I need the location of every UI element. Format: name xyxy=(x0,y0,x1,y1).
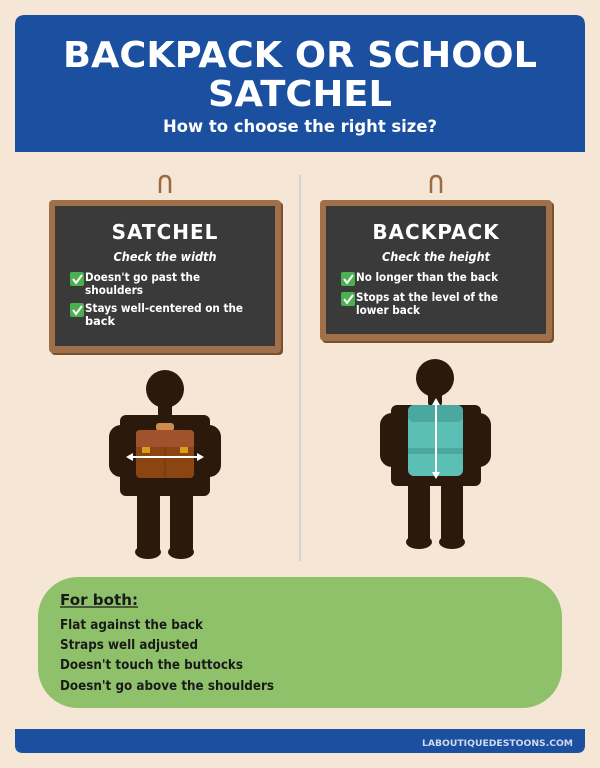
footer xyxy=(15,729,585,753)
panel: satchel board: SATCHEL xyxy=(112,220,218,244)
checklist xyxy=(341,270,498,317)
checklist: Stops at the level of the xyxy=(356,290,498,304)
figure: backpack xyxy=(380,359,491,549)
panel: satchel board xyxy=(49,176,283,355)
arrow: height xyxy=(432,398,440,479)
icon: backpack bag xyxy=(408,405,463,476)
header xyxy=(15,15,585,152)
panel: backpack board: Check the height xyxy=(382,249,491,264)
checklist: Doesn't go past the xyxy=(85,270,200,284)
figure: satchel xyxy=(109,370,221,559)
panel: backpack board xyxy=(320,176,554,343)
title: BACKPACK OR SCHOOL xyxy=(63,35,537,76)
list: Flat against the back xyxy=(60,618,203,633)
checklist: back xyxy=(85,314,115,328)
panel: for both xyxy=(38,577,562,708)
checklist: shoulders xyxy=(85,283,143,297)
icon: hook xyxy=(160,176,170,193)
checklist xyxy=(70,270,243,328)
panel: for both: For both: xyxy=(60,591,138,609)
panel: satchel board: Check the width xyxy=(114,249,217,264)
checklist: No longer than the back xyxy=(356,270,498,284)
title: SATCHEL xyxy=(208,74,392,115)
list: Doesn't go above the shoulders xyxy=(60,679,274,694)
title xyxy=(63,35,537,115)
icon: hook xyxy=(431,176,441,193)
list xyxy=(60,618,274,694)
checklist: Stays well-centered on the xyxy=(85,301,243,315)
list: Straps well adjusted xyxy=(60,638,198,653)
list: Doesn't touch the buttocks xyxy=(60,658,243,673)
panel: backpack board: BACKPACK xyxy=(372,220,500,244)
arrow: width xyxy=(126,453,204,461)
checklist: lower back xyxy=(356,303,420,317)
icon: satchel bag xyxy=(136,423,194,478)
subtitle: How to choose the right size? xyxy=(163,117,437,137)
footer: LABOUTIQUEDESTOONS.COM xyxy=(422,739,573,749)
